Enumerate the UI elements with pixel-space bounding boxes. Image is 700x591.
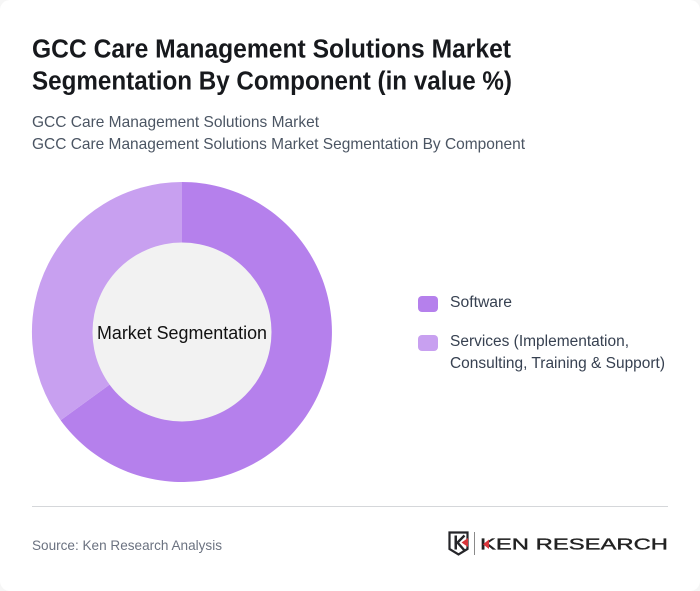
legend item: Software bbox=[418, 294, 512, 312]
legend item: Software: Software bbox=[450, 294, 512, 311]
title: Segmentation By Component (in value %) bbox=[32, 68, 512, 96]
legend bbox=[418, 294, 665, 372]
centre label: Market Segmentation bbox=[97, 323, 267, 343]
donut centre bbox=[92, 242, 272, 422]
title bbox=[32, 36, 512, 96]
logo: Ken Research bbox=[450, 532, 668, 555]
legend item: Services: Consulting, Training & Support) bbox=[450, 355, 665, 372]
source note: Source: Ken Research Analysis bbox=[32, 537, 222, 553]
segment: Services bbox=[32, 182, 182, 420]
legend item: Services: Services (Implementation, bbox=[450, 333, 629, 350]
segment: Software bbox=[61, 182, 332, 482]
title: GCC Care Management Solutions Market bbox=[32, 36, 511, 64]
subtitle: GCC Care Management Solutions Market Segmentation By Component bbox=[32, 136, 526, 153]
subtitle: GCC Care Management Solutions Market bbox=[32, 114, 320, 131]
legend item: Services bbox=[418, 333, 665, 372]
donut chart bbox=[32, 182, 332, 482]
subtitle bbox=[32, 114, 526, 153]
wordmark: KEN RESEARCH bbox=[480, 536, 668, 554]
icon: shield bbox=[450, 532, 468, 554]
